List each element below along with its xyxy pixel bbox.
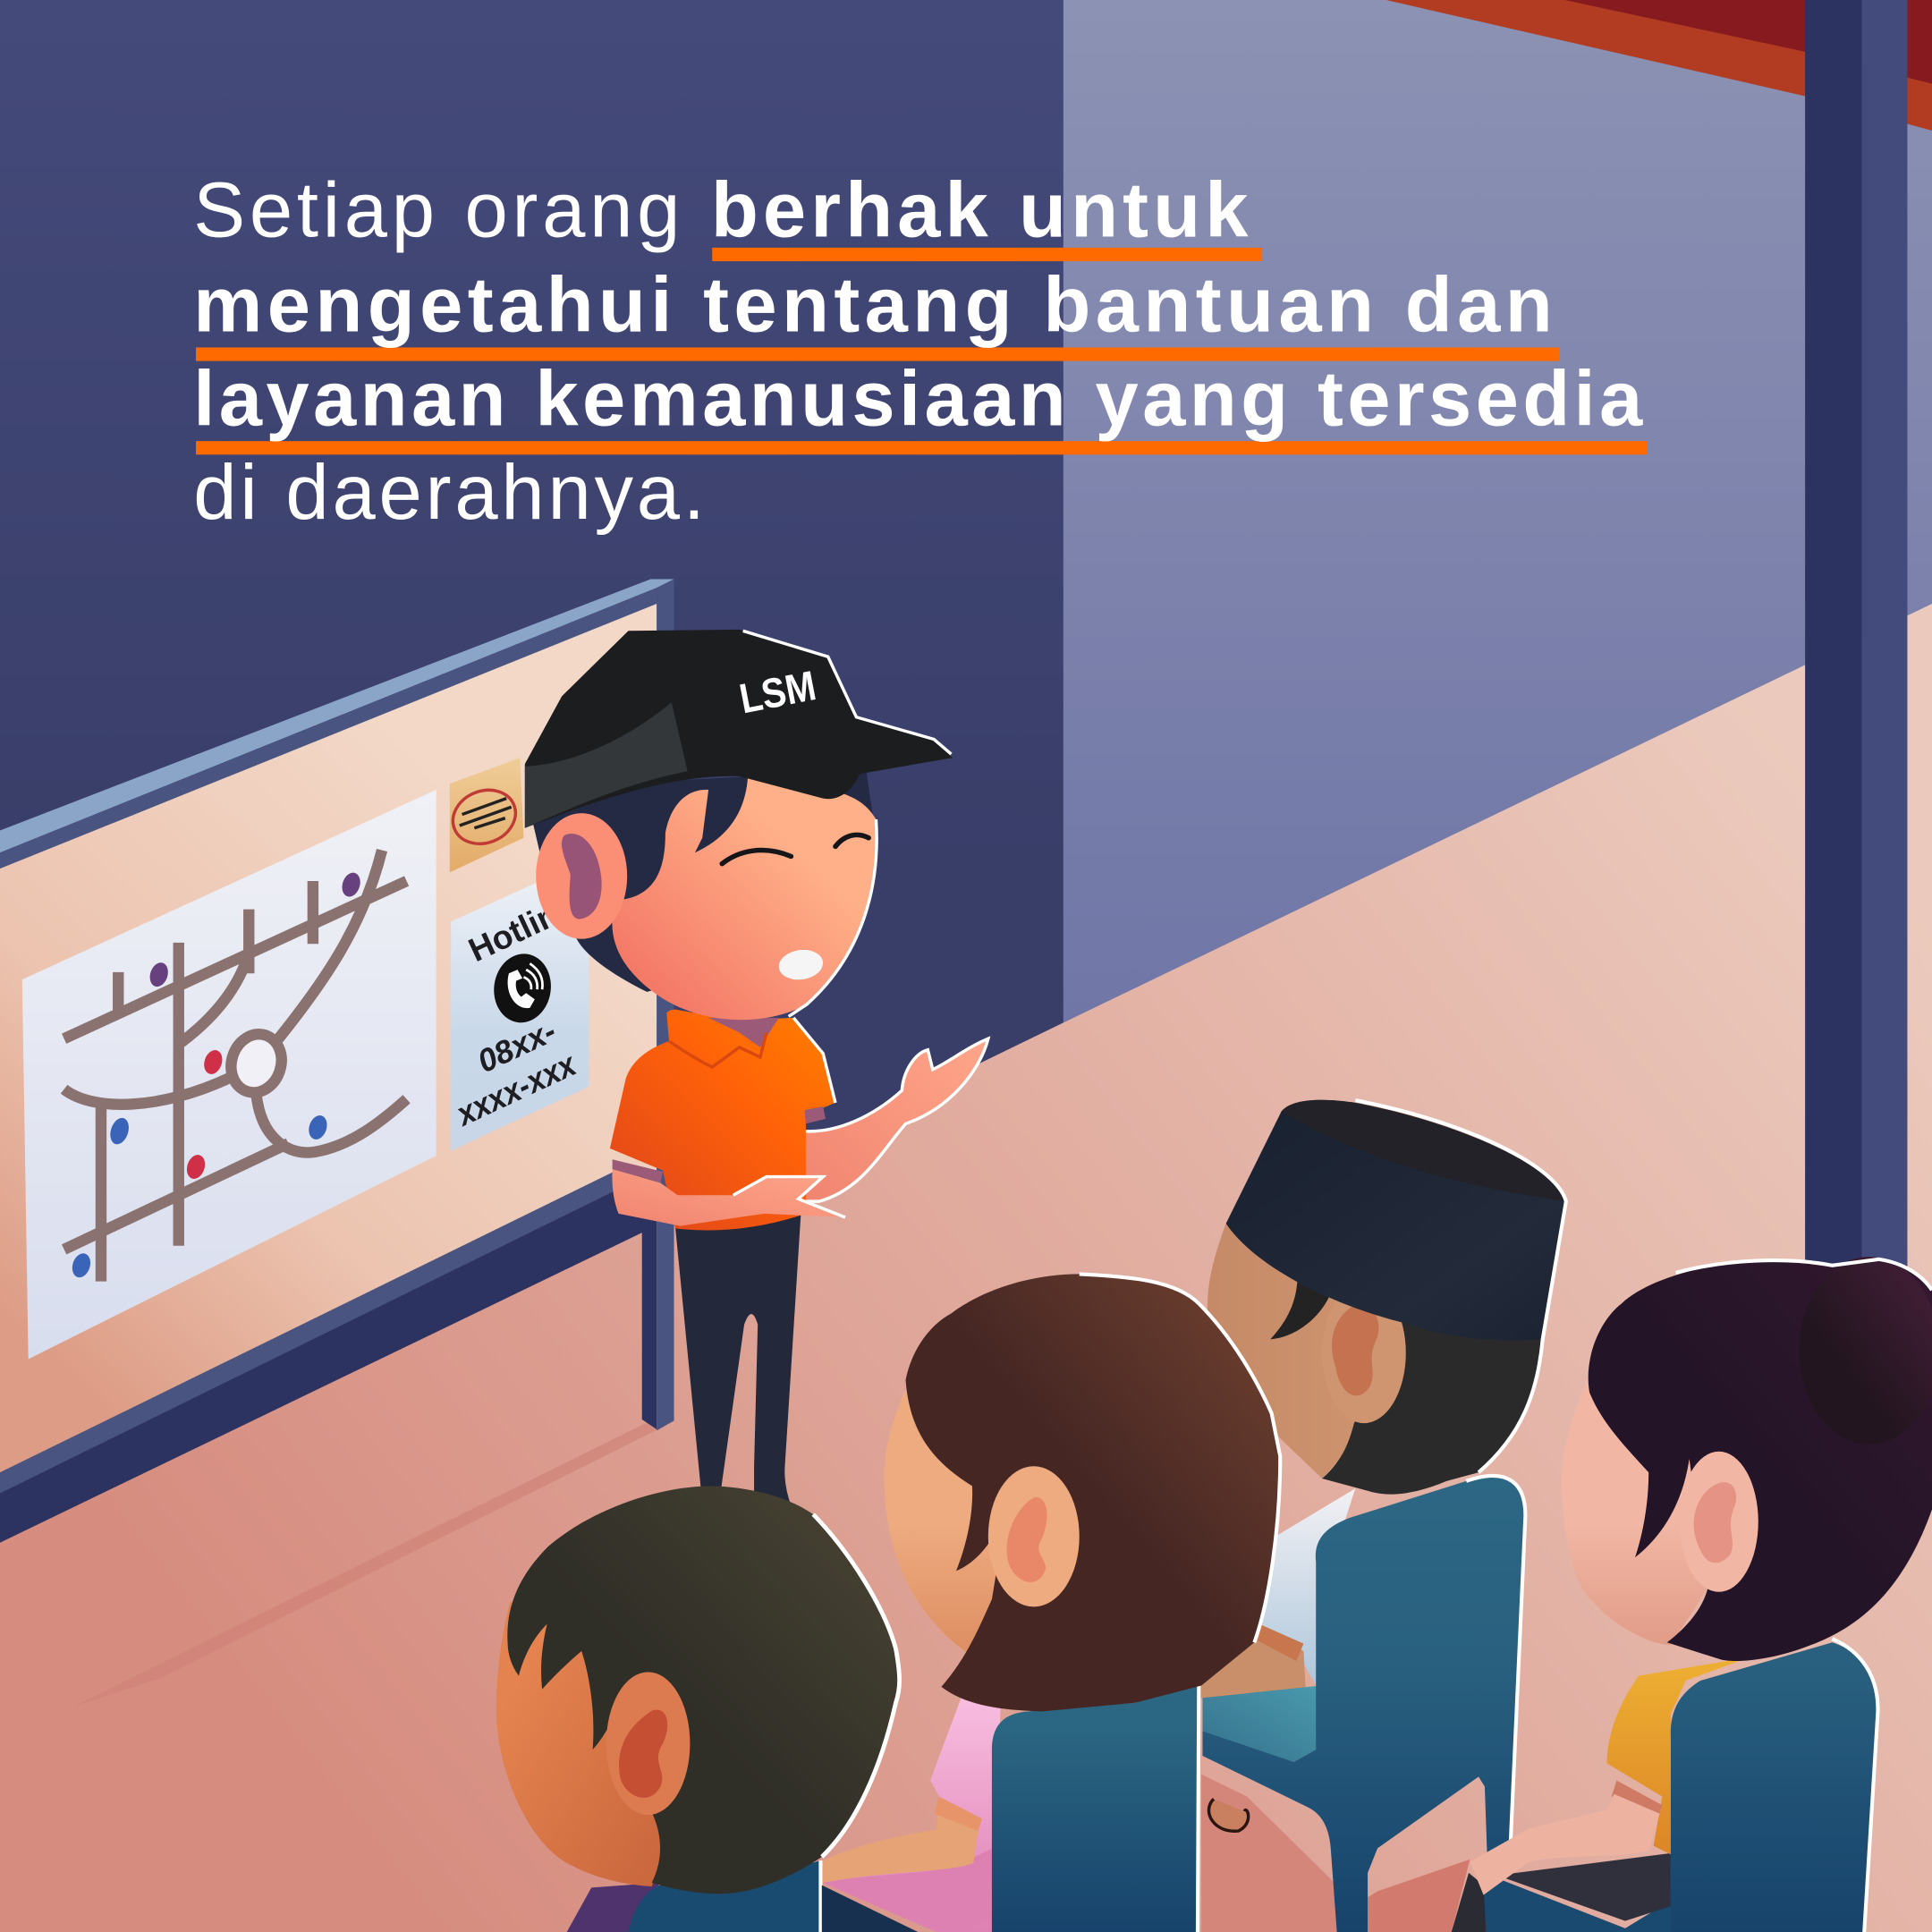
hotline poster: Hotline <box>462 887 580 969</box>
chair back <box>1671 1642 1877 1932</box>
roof beam <box>1386 0 1932 131</box>
pillar <box>1805 0 1907 1306</box>
orange shirt <box>610 1010 835 1230</box>
heading underlines <box>196 248 1648 454</box>
hair <box>905 1274 1279 1711</box>
background: right wall <box>1063 0 1932 1022</box>
hair <box>1589 1259 1932 1661</box>
icon: phone <box>489 950 555 1026</box>
face <box>1561 1374 1750 1645</box>
sticky note <box>445 758 523 872</box>
foot <box>1208 1799 1249 1831</box>
face <box>1208 1224 1393 1479</box>
ear <box>1680 1452 1758 1592</box>
ear <box>606 1672 690 1815</box>
audience member: woman with brown hair <box>823 1274 1280 1932</box>
background: floor <box>0 604 1932 1932</box>
bun <box>1799 1257 1932 1444</box>
heading text: di daerahnya. <box>193 449 705 536</box>
face <box>612 776 877 1020</box>
floor shadow under chair <box>1201 1775 1470 1932</box>
trousers <box>675 1214 801 1505</box>
map poster <box>22 790 436 1359</box>
heading text: berhak untuk <box>711 166 1249 253</box>
audience member: man with black cap <box>1182 1100 1566 1932</box>
seat <box>1202 1685 1321 1762</box>
chair <box>1202 1476 1525 1932</box>
chair <box>992 1675 1199 1932</box>
hair <box>507 1486 899 1894</box>
hair back <box>525 770 876 992</box>
heading text: mengetahui tentang bantuan dan <box>193 262 1553 349</box>
face <box>885 1391 1022 1654</box>
arm <box>1470 1794 1660 1895</box>
audience member: boy <box>496 1486 918 1932</box>
cap <box>525 630 953 828</box>
eyes <box>722 835 869 864</box>
ear <box>988 1466 1080 1606</box>
hair <box>1322 1322 1543 1495</box>
face <box>496 1602 665 1886</box>
background: left wall <box>0 0 1063 1540</box>
heading text: layanan kemanusiaan yang tersedia <box>193 355 1643 442</box>
heading text <box>193 166 1643 536</box>
cap: LSM <box>736 662 819 722</box>
ear <box>1322 1283 1406 1423</box>
hotline poster <box>449 859 589 1151</box>
raised forearm <box>801 1038 988 1201</box>
floor shadow of board <box>74 1420 658 1707</box>
purple shirt and chair <box>567 1883 659 1932</box>
hotline poster: 08xx- <box>472 1013 562 1080</box>
arm <box>823 1799 979 1883</box>
presenter <box>525 630 988 1505</box>
ear <box>536 813 627 939</box>
seat and chair base <box>1474 1873 1675 1932</box>
audience member: woman with bun <box>1452 1257 1932 1932</box>
pink shirt <box>823 1698 1001 1932</box>
white shirt <box>1257 1488 1355 1698</box>
heading text: Setiap orang <box>193 166 680 253</box>
forearm <box>1182 1624 1306 1698</box>
mouth <box>777 947 825 982</box>
yellow shirt <box>1606 1657 1750 1857</box>
hotline poster: xxxx-xxx <box>449 1045 582 1133</box>
notice board <box>0 579 674 1543</box>
folded forearm <box>612 1169 845 1226</box>
black cap <box>1226 1100 1566 1341</box>
